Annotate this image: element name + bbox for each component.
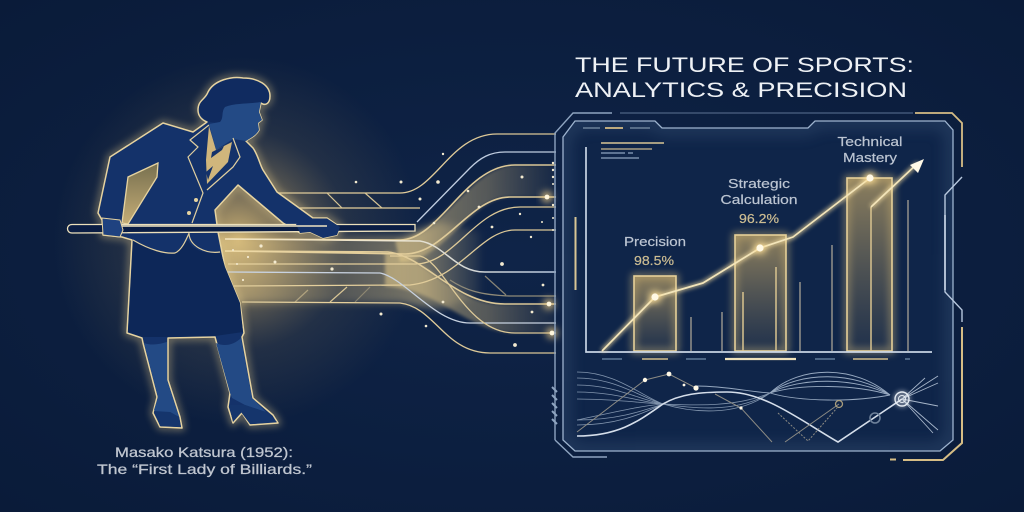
skirt [128, 240, 243, 337]
bars [634, 178, 892, 351]
trend nodes [649, 172, 876, 303]
stream glow bands [215, 165, 555, 333]
panel inner frame [563, 121, 953, 451]
panel edge glow [563, 121, 953, 451]
glowing nodes [542, 192, 557, 338]
axis dashes [602, 358, 910, 360]
billiard cue [68, 224, 415, 233]
bar labels: Precision [624, 234, 686, 249]
stream diagonal ticks [295, 193, 506, 302]
header dashes [583, 127, 650, 129]
bar glows [634, 178, 892, 351]
hair [199, 79, 269, 123]
bar chart [586, 147, 932, 359]
star rays [902, 376, 938, 433]
figure: Masako Katsura silhouette [68, 78, 415, 428]
panel: analytics dashboard [552, 113, 962, 460]
lapels and seams [133, 125, 240, 253]
arm gap with gold glow [122, 163, 158, 224]
title: ANALYTICS & PRECISION [575, 79, 907, 102]
thin data lines [691, 200, 908, 351]
left hand on cue [102, 218, 123, 237]
bar labels: 96.2% [739, 211, 779, 226]
caption: Masako Katsura: Masako Katsura (1952): [115, 444, 293, 460]
axes [586, 147, 932, 352]
constellation lines [577, 374, 839, 442]
rings [836, 390, 911, 423]
upper streams [225, 134, 556, 286]
data flow streams from cue to dashboard [215, 134, 556, 353]
outline glow [98, 78, 340, 428]
caption: Masako Katsura [97, 444, 312, 477]
bar labels: Mastery [843, 150, 898, 165]
title [575, 54, 914, 102]
main wave line [577, 392, 902, 442]
bar labels [624, 134, 903, 268]
tie dark stripes [206, 146, 224, 180]
bar labels: 98.5% [634, 253, 674, 268]
wave dots [643, 372, 743, 410]
panel border [563, 121, 953, 451]
title: THE FUTURE OF SPORTS: [575, 54, 914, 77]
shirt collar gold [206, 126, 232, 184]
shoes [154, 405, 277, 427]
body silhouette [98, 78, 340, 428]
left wave bundle [577, 372, 770, 425]
legend lines [601, 143, 664, 158]
face and neck [209, 102, 262, 150]
wave chart [577, 372, 938, 442]
top header bar [700, 126, 770, 130]
trend line with arrow [602, 159, 924, 351]
caption: Masako Katsura: The “First Lady of Billiards.” [97, 461, 312, 477]
jacket buttons [187, 198, 198, 215]
cue highlight [122, 225, 327, 227]
lower streams [225, 239, 556, 353]
right hand [296, 218, 340, 238]
golden halo behind figure [53, 55, 423, 425]
bar labels: Calculation [720, 192, 798, 207]
bar labels: Technical [838, 134, 903, 149]
right wave bundle [697, 372, 890, 400]
frame hatching [552, 387, 557, 424]
bar labels: Strategic [728, 176, 791, 191]
particle dots [232, 153, 554, 347]
legs [144, 338, 266, 417]
panel outer frame [552, 113, 962, 460]
